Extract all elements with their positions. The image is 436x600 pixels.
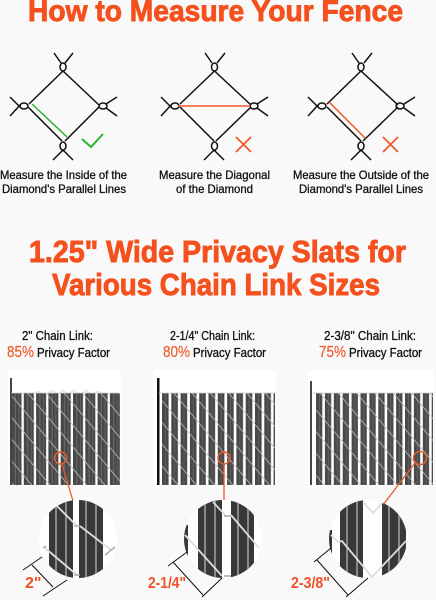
privacy factor: 75% — [319, 344, 346, 361]
measure line: green — [32, 104, 67, 137]
label: 2-1/4" Chain Link: — [170, 329, 255, 343]
label: 2" Chain Link: — [22, 329, 93, 343]
dimension label: 2" — [25, 575, 41, 592]
caption: Measure the Diagonal — [159, 168, 270, 182]
fence photo — [153, 370, 276, 486]
panel: 2-3/8 inch chain link — [291, 329, 434, 597]
measure line: red diagonal — [178, 105, 250, 107]
zoom pointer — [383, 452, 426, 505]
fence photo — [308, 370, 434, 486]
diagram: chain link diamond, diagonal — [161, 53, 268, 160]
caption: Diamond's Parallel Lines — [2, 182, 126, 196]
icon: check mark — [82, 134, 103, 147]
dimension label: 2-1/4" — [148, 575, 186, 592]
panel: measure diagonal — [159, 53, 270, 196]
label: 2-3/8" Chain Link: — [324, 329, 416, 343]
measure line: red outside — [329, 102, 365, 138]
dimension marker — [23, 557, 67, 596]
heading: privacy slats: 1.25" Wide Privacy Slats for — [29, 234, 406, 269]
heading: privacy slats: Various Chain Link Sizes — [52, 267, 380, 302]
icon: cross — [236, 137, 251, 152]
fence photo — [8, 370, 121, 486]
privacy factor: Privacy Factor — [193, 346, 266, 360]
panel: 2-1/4 inch chain link — [148, 329, 276, 597]
icon: cross — [383, 137, 398, 152]
magnified view — [184, 500, 260, 578]
privacy factor: Privacy Factor — [37, 346, 110, 360]
caption: Diamond's Parallel Lines — [299, 182, 423, 196]
dimension marker — [168, 552, 222, 597]
privacy factor: 85% — [7, 344, 34, 361]
zoom pointer — [54, 452, 73, 501]
caption: Measure the Outside of the — [293, 168, 429, 182]
magnified view — [42, 500, 116, 578]
panel: measure inside — [0, 53, 127, 196]
caption: of the Diamond — [176, 182, 253, 196]
privacy factor: 80% — [163, 344, 190, 361]
dimension marker — [314, 548, 368, 597]
zoom pointer — [218, 452, 230, 500]
diagram: chain link diamond, outside — [308, 53, 415, 160]
privacy factor: Privacy Factor — [349, 346, 422, 360]
caption: Measure the Inside of the — [0, 168, 127, 182]
panel: measure outside — [293, 53, 429, 196]
panel: 2 inch chain link — [7, 329, 121, 596]
magnified view — [329, 500, 406, 578]
dimension label: 2-3/8" — [291, 575, 330, 592]
diagram: chain link diamond, inside — [10, 53, 117, 160]
